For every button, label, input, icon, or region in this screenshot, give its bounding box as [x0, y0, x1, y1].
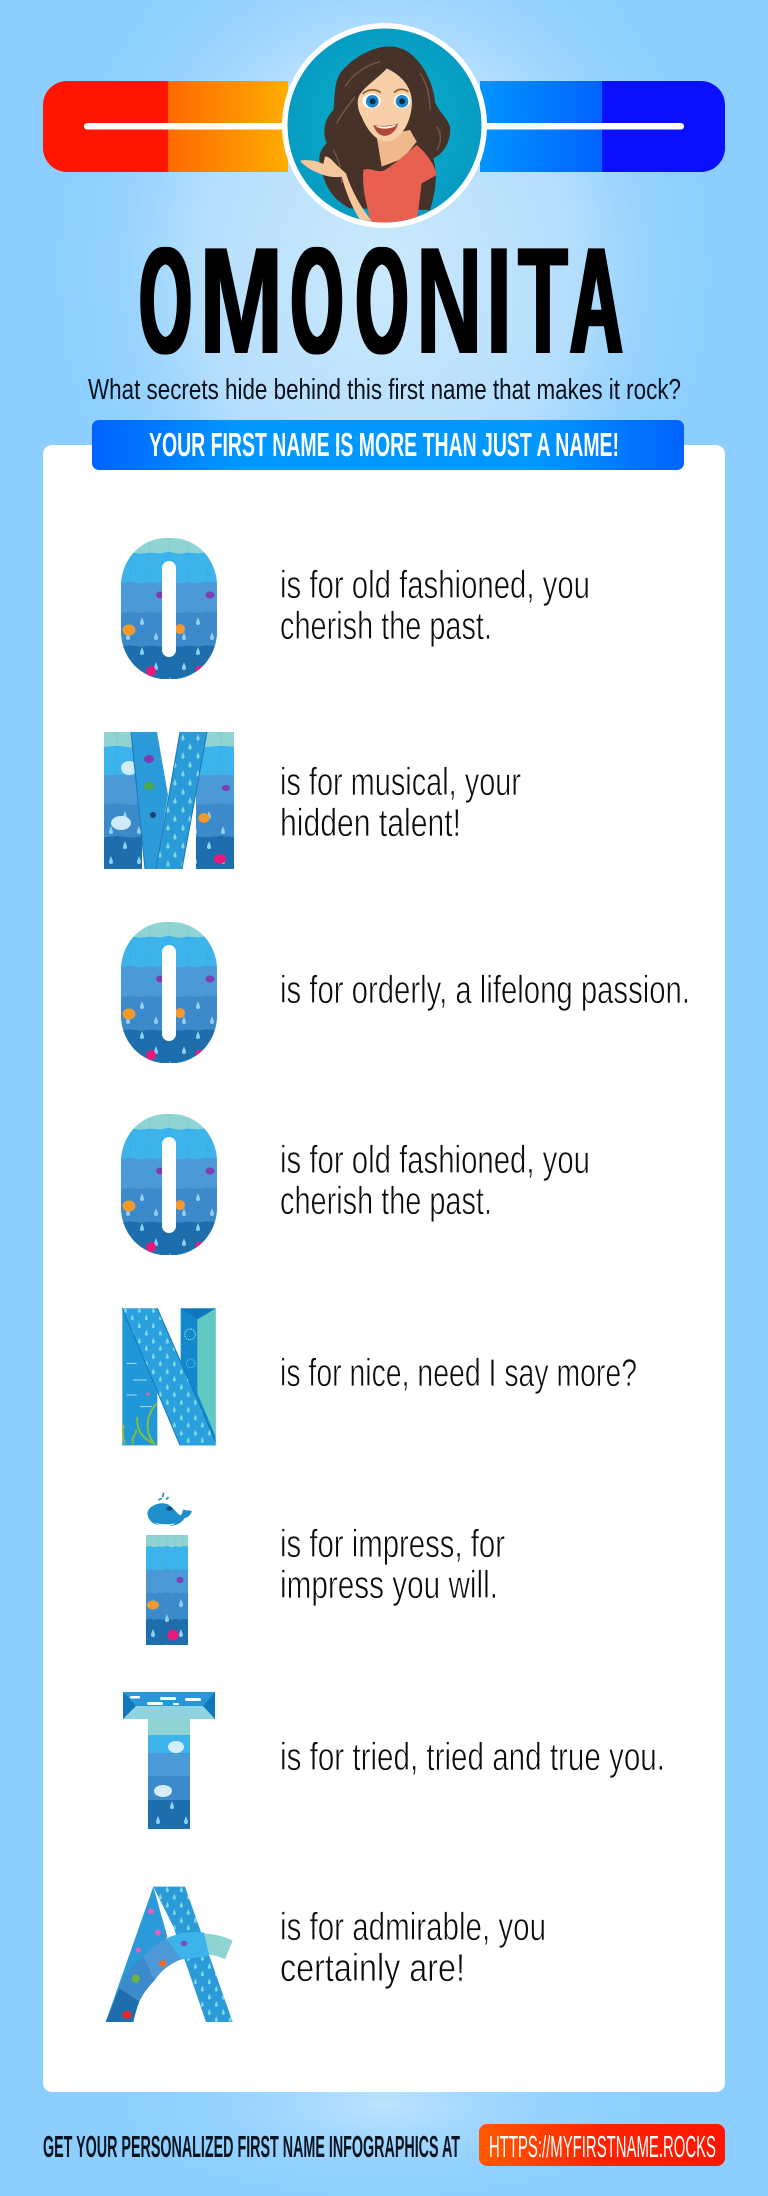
text: O meaning: [280, 564, 590, 648]
row 5: letter N: [122, 1308, 637, 1445]
text: N meaning: is for nice, need I say more?: [280, 1352, 637, 1395]
text: O meaning: cherish the past.: [280, 1180, 492, 1223]
text: O meaning: cherish the past.: [280, 605, 492, 648]
text: M meaning: hidden talent!: [280, 802, 461, 845]
text: A meaning: is for admirable, you: [280, 1906, 546, 1949]
footer url button: [479, 2124, 725, 2166]
title: O: [356, 216, 408, 385]
title: A: [570, 217, 623, 386]
text: A meaning: [280, 1906, 546, 1990]
banner: [92, 420, 684, 470]
text: M meaning: [280, 761, 521, 845]
row 3: letter O: [121, 922, 690, 1063]
text: i meaning: is for impress, for: [280, 1523, 505, 1566]
text: M meaning: is for musical, your: [280, 761, 521, 804]
row 8: letter A: [106, 1887, 546, 2022]
icon: letter T: [123, 1692, 215, 1829]
title: N: [416, 216, 482, 386]
icon: letter M: [104, 732, 234, 869]
row 6: letter i: [146, 1493, 505, 1645]
title: [140, 215, 623, 386]
white content panel: [43, 445, 725, 2092]
icon: letter N: [122, 1308, 216, 1445]
text: O meaning: is for old fashioned, you: [280, 564, 590, 607]
icon: letter A: [106, 1887, 233, 2022]
row 2: letter M: [104, 732, 521, 869]
icon: whale: [147, 1493, 192, 1526]
title: T: [518, 215, 568, 385]
header colour bar: [43, 81, 725, 172]
title: O: [291, 216, 343, 385]
title: I: [484, 216, 514, 385]
title: M: [200, 216, 283, 386]
text: O meaning: [280, 1139, 590, 1223]
text: O meaning: is for old fashioned, you: [280, 1139, 590, 1182]
text: A meaning: certainly are!: [280, 1947, 465, 1990]
row 1: letter O: [121, 538, 590, 679]
icon: letter i bar: [146, 1535, 188, 1645]
text: i meaning: impress you will.: [280, 1564, 498, 1607]
title: O: [140, 216, 192, 385]
text: i meaning: [280, 1523, 505, 1607]
row 7: letter T: [123, 1692, 665, 1829]
avatar portrait: [282, 23, 487, 228]
row 4: letter O: [121, 1114, 590, 1255]
